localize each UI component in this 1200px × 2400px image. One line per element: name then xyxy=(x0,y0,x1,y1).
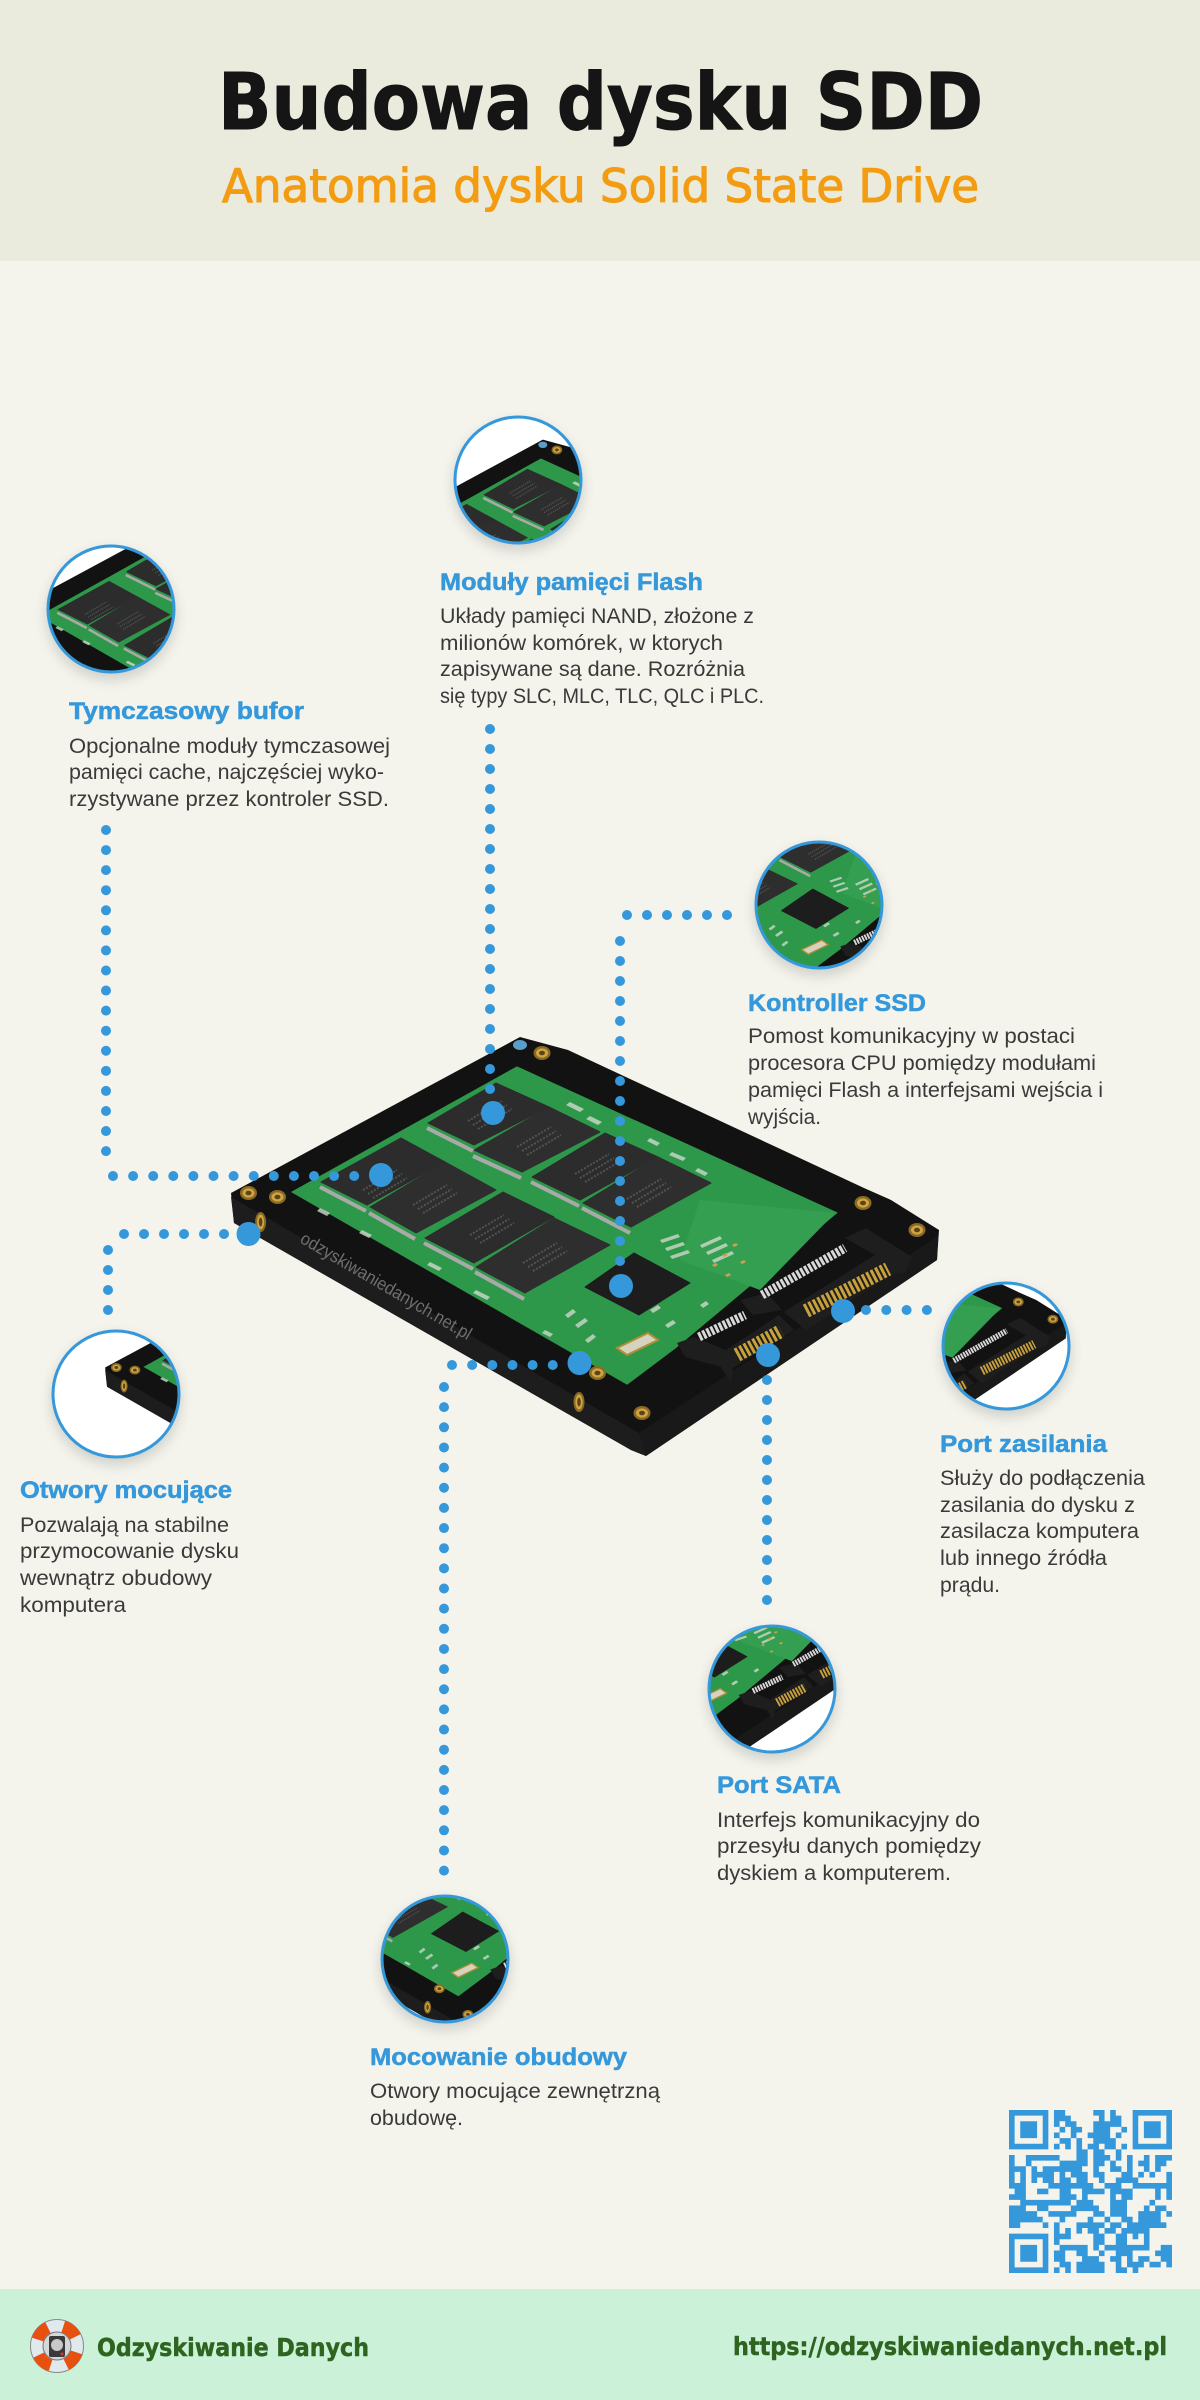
description xyxy=(717,1809,982,1885)
header band xyxy=(0,0,1200,261)
description xyxy=(19,1514,239,1617)
description: przymocowanie dysku xyxy=(20,1540,239,1563)
watermark: odzyskiwaniedanych.net.pl xyxy=(297,1228,475,1344)
connector: Port SATA xyxy=(756,1343,780,1601)
description xyxy=(940,1467,1145,1597)
footer band xyxy=(0,2289,1200,2400)
central SSD illustration xyxy=(231,1037,939,1456)
description: wyjścia. xyxy=(747,1106,821,1129)
thumbnail: flash modules xyxy=(449,416,587,555)
subtitle: Anatomia dysku Solid State Drive xyxy=(222,159,979,213)
description: Opcjonalne moduły tymczasowej xyxy=(69,735,390,758)
description: milionów komórek, w ktorych xyxy=(440,632,723,655)
description: zasilacza komputera xyxy=(940,1520,1139,1543)
QR code xyxy=(1009,2113,1172,2270)
heading: Moduły pamięci Flash xyxy=(440,569,703,596)
description: zasilania do dysku z xyxy=(940,1494,1135,1517)
description: obudowę. xyxy=(370,2107,463,2130)
description: się typy SLC, MLC, TLC, QLC i PLC. xyxy=(440,685,764,708)
description xyxy=(370,2080,660,2130)
connector: Tymczasowy bufor xyxy=(106,830,393,1187)
thumbnail: power port xyxy=(937,1282,1075,1421)
description: Służy do podłączenia xyxy=(940,1467,1145,1490)
heading: Port zasilania xyxy=(940,1431,1108,1458)
description xyxy=(747,1025,1103,1129)
connector: Otwory mocujące xyxy=(108,1222,260,1311)
thumbnail: mounting holes xyxy=(47,1330,185,1469)
panel: Tymczasowy bufor xyxy=(42,544,389,810)
description: zapisywane są dane. Rozróżnia xyxy=(440,658,745,681)
heading: Mocowanie obudowy xyxy=(370,2044,628,2071)
panel: Port SATA xyxy=(703,1624,981,1884)
heading: Otwory mocujące xyxy=(20,1477,232,1504)
thumbnail: enclosure mounting xyxy=(376,1894,514,2034)
title: Budowa dysku SDD xyxy=(218,58,983,148)
heading: Tymczasowy bufor xyxy=(69,698,304,725)
description xyxy=(440,605,764,708)
thumbnail: SATA port xyxy=(703,1624,841,1764)
description: pamięci cache, najczęściej wyko- xyxy=(69,761,384,784)
description: komputera xyxy=(20,1594,126,1617)
description: rzystywane przez kontroler SSD. xyxy=(69,788,389,811)
panel: Otwory mocujące xyxy=(20,1330,238,1616)
description: Interfejs komunikacyjny do xyxy=(717,1809,980,1832)
thumbnail: cache chips xyxy=(42,544,180,684)
description: lub innego źródła xyxy=(940,1547,1107,1570)
description: przesyłu danych pomiędzy xyxy=(717,1835,982,1858)
description: prądu. xyxy=(940,1574,1000,1597)
panel: Kontroller SSD xyxy=(748,840,1102,1128)
description: dyskiem a komputerem. xyxy=(717,1862,951,1885)
connector: Port zasilania xyxy=(831,1299,928,1323)
connector: Moduły pamięci Flash xyxy=(481,729,505,1125)
description xyxy=(69,735,390,811)
icon: lifebuoy with hard drive xyxy=(30,2320,84,2372)
panel: Port zasilania xyxy=(937,1282,1145,1596)
description: Otwory mocujące zewnętrzną xyxy=(370,2080,660,2103)
description: Układy pamięci NAND, złożone z xyxy=(440,605,754,628)
description: wewnątrz obudowy xyxy=(19,1567,213,1590)
brand name: Odzyskiwanie Danych xyxy=(97,2333,369,2362)
heading: Port SATA xyxy=(717,1772,841,1799)
heading: Kontroller SSD xyxy=(748,990,926,1017)
description: Pozwalają na stabilne xyxy=(20,1514,229,1537)
connector: Mocowanie obudowy xyxy=(444,1351,592,1872)
connector: Kontroller SSD xyxy=(609,915,728,1298)
description: pamięci Flash a interfejsami wejścia i xyxy=(748,1079,1103,1102)
description: Pomost komunikacyjny w postaci xyxy=(748,1025,1075,1048)
panel: Moduły pamięci Flash xyxy=(440,416,762,708)
description: procesora CPU pomiędzy modułami xyxy=(748,1052,1096,1075)
panel: Mocowanie obudowy xyxy=(370,1894,660,2130)
thumbnail: controller xyxy=(750,840,888,980)
